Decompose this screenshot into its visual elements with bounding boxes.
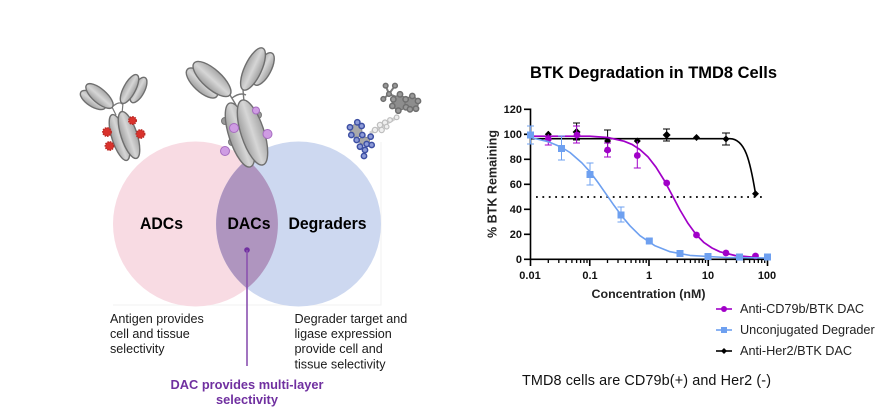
overlap: DACs bbox=[216, 160, 278, 288]
legend: Anti-Her2/BTK DAC: Anti-Her2/BTK DAC bbox=[740, 344, 852, 358]
50 percent reference line bbox=[536, 196, 763, 198]
y axis: 60 bbox=[510, 179, 522, 191]
series: Unconjugated Degrader bbox=[527, 126, 771, 260]
x axis: 0.01 bbox=[519, 270, 541, 282]
x axis: 1 bbox=[646, 270, 652, 282]
legend bbox=[716, 302, 875, 358]
text: antigen selectivity: Antigen provides bbox=[110, 312, 204, 326]
x axis: 10 bbox=[702, 270, 714, 282]
legend: Anti-CD79b/BTK DAC: Anti-CD79b/BTK DAC bbox=[740, 302, 864, 316]
x axis title: Concentration (nM) bbox=[592, 287, 706, 301]
circle: Degraders bbox=[216, 142, 381, 306]
y axis: 0 bbox=[516, 254, 522, 266]
venn diagram bbox=[113, 142, 381, 306]
x axis: 100 bbox=[758, 270, 776, 282]
icon: degrader molecule bbox=[347, 83, 421, 159]
x axis: 0.1 bbox=[582, 270, 598, 282]
chart title: BTK Degradation in TMD8 Cells bbox=[530, 64, 777, 82]
text: degrader selectivity: Degrader target and bbox=[294, 312, 407, 326]
y axis: 80 bbox=[510, 154, 522, 166]
circle: ADCs bbox=[113, 142, 278, 306]
callout: DAC multi-layer selectivity: DAC provides multi-layer bbox=[171, 377, 323, 392]
y axis title: % BTK Remaining bbox=[484, 130, 500, 238]
icon: ADC antibody bbox=[77, 72, 150, 163]
icon: DAC antibody bbox=[182, 45, 279, 170]
callout: DAC multi-layer selectivity: selectivity bbox=[216, 392, 279, 407]
series: Anti-CD79b/BTK DAC bbox=[530, 126, 759, 259]
text: degrader selectivity: provide cell and bbox=[294, 342, 383, 356]
y axis: 40 bbox=[510, 204, 522, 216]
text: antigen selectivity: selectivity bbox=[110, 342, 165, 356]
label: DACs: DACs bbox=[228, 215, 270, 233]
y axis: 100 bbox=[504, 129, 522, 141]
text: degrader selectivity: tissue selectivity bbox=[294, 358, 386, 372]
x axis bbox=[519, 259, 776, 282]
series: Anti-Her2/BTK DAC bbox=[530, 123, 759, 197]
y axis: 120 bbox=[504, 104, 522, 116]
text: degrader selectivity: ligase expression bbox=[294, 327, 392, 341]
callout line: DAC marker bbox=[244, 247, 250, 366]
label: Degraders: Degraders bbox=[288, 215, 366, 233]
y axis bbox=[504, 104, 531, 266]
label: ADCs: ADCs bbox=[140, 215, 183, 233]
dose-response chart bbox=[484, 104, 776, 301]
note: cell line status: TMD8 cells are CD79b(+) and Her2 (-) bbox=[522, 373, 771, 389]
legend: Unconjugated Degrader: Unconjugated Degrader bbox=[740, 323, 875, 337]
text: antigen selectivity: cell and tissue bbox=[110, 327, 190, 341]
y axis: 20 bbox=[510, 229, 522, 241]
